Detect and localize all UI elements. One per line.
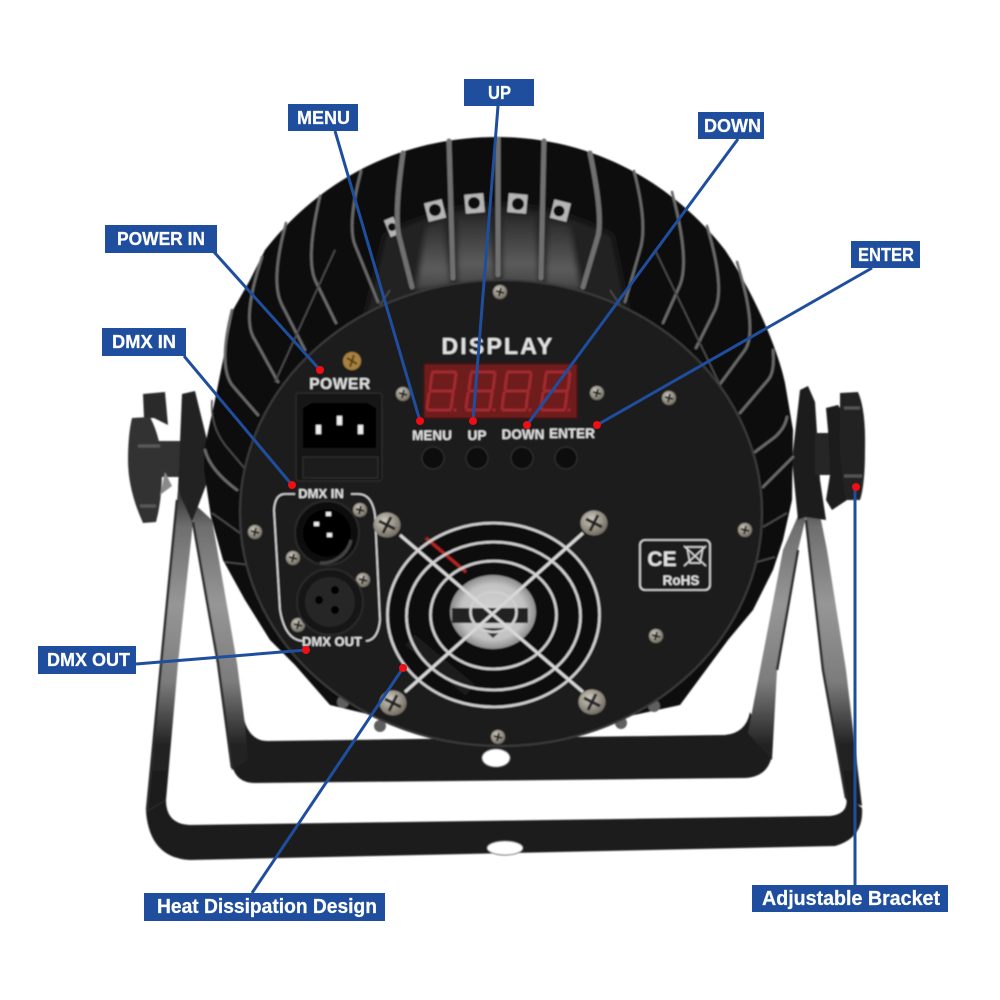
- left bracket arms: [146, 490, 248, 812]
- label: MENU: MENU: [297, 108, 350, 128]
- arm dark edges: [147, 500, 846, 810]
- button labels: [412, 426, 595, 443]
- compliance mark CE RoHS: [640, 540, 710, 590]
- compliance mark CE RoHS: CE: [647, 548, 677, 571]
- fan with wire grille: [374, 510, 608, 716]
- side fins: [205, 171, 793, 565]
- XLR out connector: [297, 569, 363, 635]
- DMX out label: DMX OUT: [302, 634, 362, 649]
- bracket mounting holes: [482, 749, 523, 855]
- button labels: MENU: [412, 428, 452, 443]
- red LED display: [424, 364, 577, 418]
- right bracket arms: [748, 500, 862, 806]
- button labels: DOWN: [502, 427, 544, 442]
- DMX frame: [274, 494, 380, 641]
- label: UP: UP: [488, 83, 511, 103]
- label: DMX IN: [102, 328, 186, 356]
- label: ENTER: [851, 241, 920, 268]
- label: DOWN: DOWN: [704, 116, 761, 136]
- label: MENU: [288, 104, 358, 131]
- finned heat sink housing: [204, 137, 793, 745]
- inner U bracket base: [232, 712, 772, 783]
- outer U bracket base: [146, 795, 862, 860]
- product photo: rear of par light: [128, 137, 865, 860]
- red marker dots: [288, 366, 860, 672]
- push buttons: [422, 447, 577, 469]
- label: ENTER: ENTER: [858, 245, 914, 265]
- left knob: [128, 391, 208, 523]
- central core behind fins: [362, 205, 632, 330]
- label: DMX OUT: DMX OUT: [47, 650, 130, 670]
- label: DOWN: [698, 112, 764, 139]
- label: POWER IN: [105, 225, 217, 253]
- lower fin bumps: [337, 696, 660, 732]
- ground screw: [343, 352, 361, 370]
- label: UP: [464, 79, 534, 106]
- leader lines: [136, 106, 872, 893]
- button labels: ENTER: [549, 426, 595, 441]
- DMX in label: DMX IN: [298, 486, 344, 501]
- panel screws: [248, 285, 752, 744]
- compliance mark CE RoHS: RoHS: [663, 573, 699, 588]
- vent holes: [384, 193, 571, 237]
- XLR in connector: [295, 501, 359, 565]
- label: POWER IN: POWER IN: [117, 229, 205, 249]
- top fins: [397, 139, 599, 287]
- label: Heat Dissipation Design: Heat Dissipation Design: [157, 896, 377, 918]
- label: DMX OUT: [38, 646, 136, 674]
- core light panels: [416, 215, 581, 290]
- rear panel plate: [240, 280, 762, 746]
- button labels: UP: [468, 428, 486, 443]
- display heading: DISPLAY: [442, 333, 554, 359]
- right knob: [792, 386, 865, 520]
- power inlet: [296, 393, 382, 481]
- power label: POWER: [309, 376, 371, 393]
- label: Adjustable Bracket: Adjustable Bracket: [762, 888, 940, 910]
- label: DMX IN: DMX IN: [112, 332, 176, 352]
